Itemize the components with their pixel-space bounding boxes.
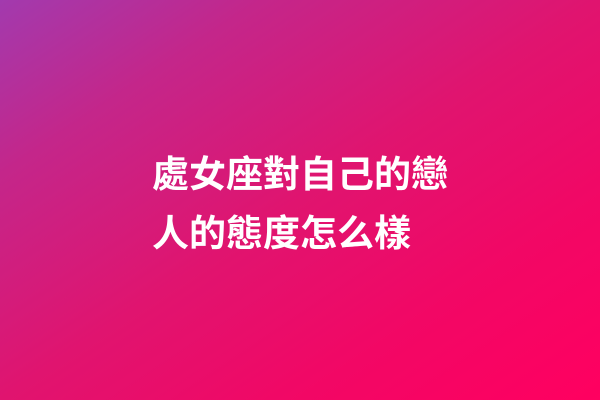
title: 處女座對自己的戀 bbox=[152, 154, 448, 195]
title bbox=[152, 154, 448, 254]
title: 人的態度怎么樣 bbox=[152, 213, 411, 254]
